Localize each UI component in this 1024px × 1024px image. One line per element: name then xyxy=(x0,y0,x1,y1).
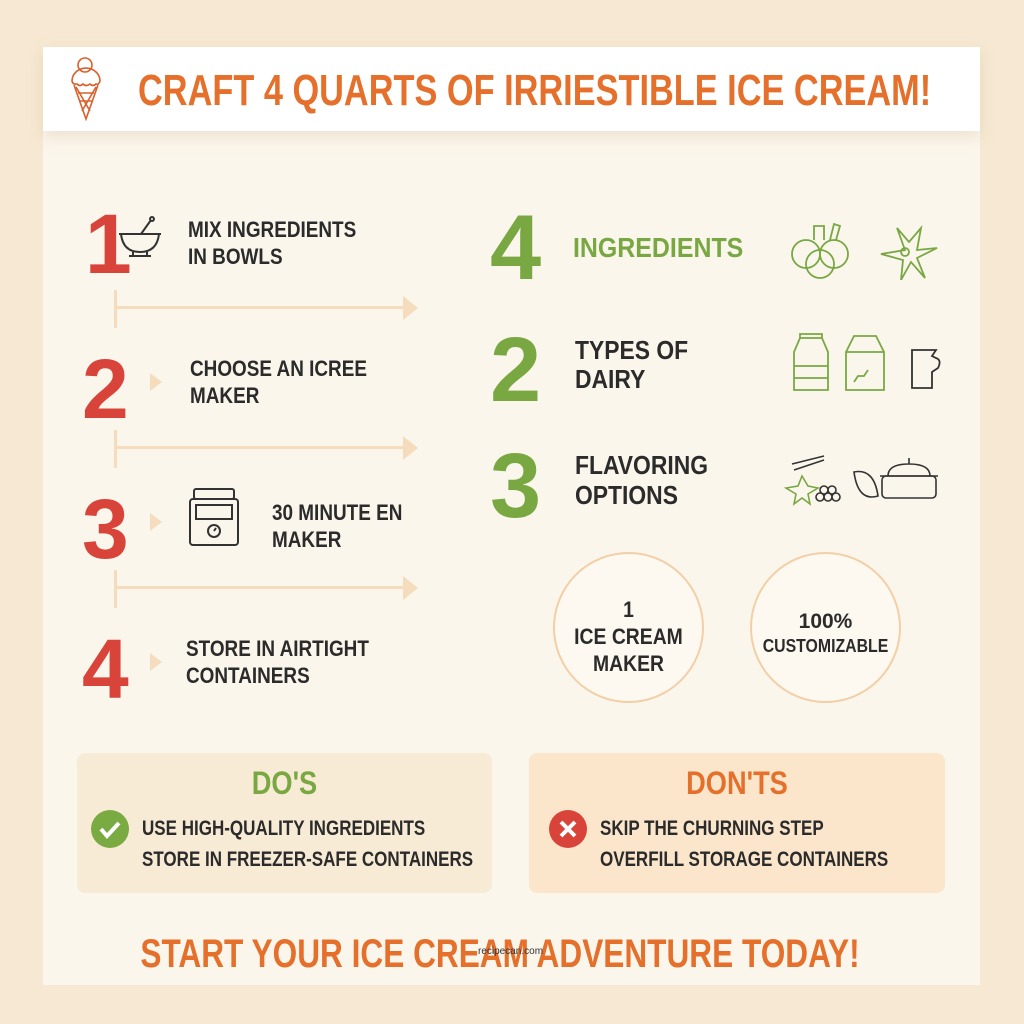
step 3: 30 MINUTE EN xyxy=(272,500,402,525)
step 3: MAKER xyxy=(272,527,341,552)
step 4 xyxy=(82,622,369,716)
panel: do's xyxy=(77,753,492,893)
panel: do's: STORE IN FREEZER-SAFE CONTAINERS xyxy=(142,848,473,871)
footer call to action: START YOUR ICE CREAM ADVENTURE TODAY! xyxy=(140,932,860,976)
arrow 3 xyxy=(114,570,418,608)
icon: cross xyxy=(549,810,587,848)
stat: 2 types of dairy xyxy=(490,319,940,421)
stat: 3 flavoring options xyxy=(490,435,938,537)
stat: 2 types of dairy: TYPES OF xyxy=(575,335,688,365)
icon: dairy xyxy=(793,333,940,391)
arrow 1 xyxy=(114,290,418,328)
arrow 2 xyxy=(114,430,418,468)
step 2: 2 xyxy=(82,342,129,436)
panel: don'ts xyxy=(529,753,945,893)
step 3 xyxy=(82,482,402,576)
step 1 xyxy=(85,197,356,291)
stat circle: 1 ice cream maker: ICE CREAM xyxy=(574,624,683,649)
panel: don'ts: OVERFILL STORAGE CONTAINERS xyxy=(600,848,888,871)
stat circle: 1 ice cream maker: 1 xyxy=(623,597,634,622)
stat circle: 100% customizable: CUSTOMIZABLE xyxy=(763,636,888,656)
step 4: 4 xyxy=(82,622,129,716)
stat: 2 types of dairy: DAIRY xyxy=(575,364,645,394)
stat: 3 flavoring options: FLAVORING xyxy=(575,450,708,480)
step 1: 1 xyxy=(85,197,132,291)
icon: ice cream cone xyxy=(71,57,101,121)
stat circle: 1 ice cream maker: MAKER xyxy=(593,651,664,676)
step 4: STORE IN AIRTIGHT xyxy=(186,636,369,661)
stat: 4 ingredients: 4 xyxy=(490,197,541,299)
icon: bowl xyxy=(119,216,161,257)
header xyxy=(43,47,980,131)
stat: 2 types of dairy: 2 xyxy=(490,319,541,421)
heading: do's: DO'S xyxy=(252,765,317,801)
heading: don'ts: DON'TS xyxy=(686,765,788,801)
stat: 4 ingredients xyxy=(490,197,938,299)
panel: do's: USE HIGH-QUALITY INGREDIENTS xyxy=(142,817,425,840)
icon: ingredients xyxy=(791,222,938,280)
step 2: CHOOSE AN ICREE xyxy=(190,356,367,381)
icon: check xyxy=(91,810,129,848)
step 2 xyxy=(82,342,367,436)
step 4: CONTAINERS xyxy=(186,663,310,688)
title: CRAFT 4 QUARTS OF IRRIESTIBLE ICE CREAM! xyxy=(138,66,931,115)
stat circle: 1 ice cream maker xyxy=(553,552,704,703)
panel: don'ts: SKIP THE CHURNING STEP xyxy=(600,817,824,840)
stat: 3 flavoring options: 3 xyxy=(490,435,541,537)
watermark: recipecan.com xyxy=(478,946,543,957)
stat circle: 100% customizable: 100% xyxy=(799,610,852,633)
step 1: IN BOWLS xyxy=(188,244,283,269)
step 3: 3 xyxy=(82,482,129,576)
stat: 4 ingredients: INGREDIENTS xyxy=(573,232,743,263)
step 2: MAKER xyxy=(190,383,259,408)
icon: ice cream machine xyxy=(189,488,239,546)
step 1: MIX INGREDIENTS xyxy=(188,217,356,242)
icon: flavorings xyxy=(784,455,938,506)
stat: 3 flavoring options: OPTIONS xyxy=(575,480,678,510)
stat circle: 100% customizable xyxy=(750,552,901,703)
